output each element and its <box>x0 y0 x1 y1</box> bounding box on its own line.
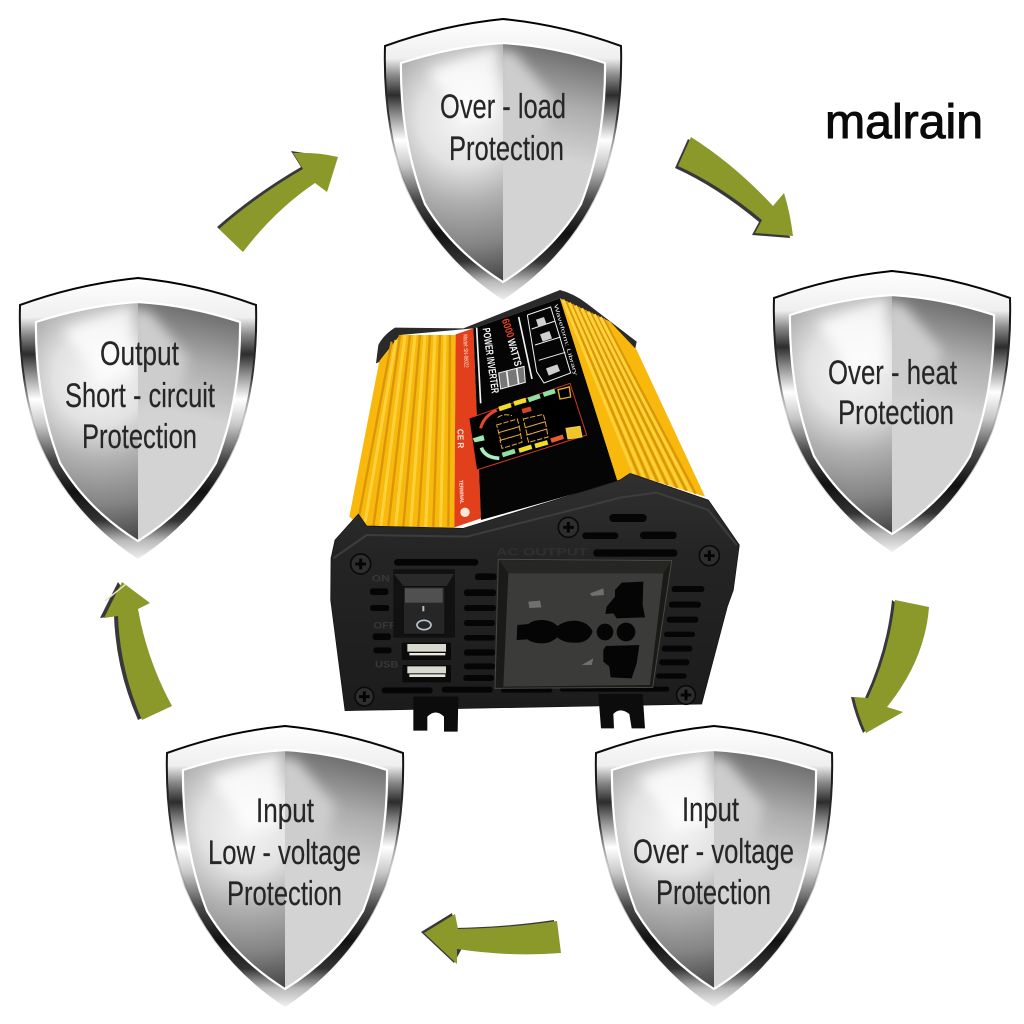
shield: Over-load Protection: Protection <box>449 130 564 168</box>
shield: Input Over-voltage Protection: Input <box>682 791 739 829</box>
rear black cap <box>376 290 637 363</box>
embossed labels: AC OUTPUT <box>496 547 588 559</box>
shield: Input Low-voltage Protection: Low - voltage <box>208 834 361 872</box>
product labels: POWER INVERTER <box>480 327 501 394</box>
shield: Over-heat Protection: Protection <box>838 394 954 432</box>
shield: Over-load Protection: Over - load <box>440 88 566 126</box>
embossed labels: OFF <box>373 621 396 631</box>
shield: Input Over-voltage Protection <box>596 726 832 1007</box>
shield: Output Short-circuit Protection: Output <box>100 335 179 373</box>
shield: Input Over-voltage Protection: Over - voltage <box>633 833 794 871</box>
inverter top housing <box>349 290 705 528</box>
power inverter <box>331 290 739 732</box>
front vents <box>370 514 704 693</box>
inverter front face <box>331 473 739 732</box>
shield: Output Short-circuit Protection <box>20 278 256 559</box>
arrow: load to heat <box>675 137 793 238</box>
logo: malrain: malrain <box>825 96 983 149</box>
shield: Input Low-voltage Protection: Protection <box>227 875 342 913</box>
right heat sink <box>560 298 705 497</box>
product labels: Waveform: Library <box>552 304 578 377</box>
arrow: over-voltage to low-voltage <box>421 913 561 964</box>
shield: Output Short-circuit Protection: Protection <box>82 418 197 456</box>
red label strip <box>454 328 481 527</box>
product labels: CE R <box>455 429 466 449</box>
left heat sink <box>349 335 456 528</box>
power switch <box>393 569 455 638</box>
product labels: 6000 <box>499 317 516 339</box>
shield: Over-heat Protection <box>774 271 1010 552</box>
screws <box>351 517 719 706</box>
shield: Over-heat Protection: Over - heat <box>828 354 957 392</box>
shield: Over-load Protection <box>385 19 621 300</box>
front housing <box>331 473 739 711</box>
shield: Input Low-voltage Protection: Input <box>256 792 314 830</box>
label icon grid <box>477 307 571 403</box>
AC socket <box>495 559 672 688</box>
shield: Output Short-circuit Protection: Short - circuit <box>65 377 215 415</box>
USB ports <box>402 643 451 682</box>
embossed labels: USB <box>375 659 399 669</box>
shield: Input Low-voltage Protection <box>167 726 403 1007</box>
arrow: heat to over-voltage <box>851 600 929 733</box>
arrow: low-voltage to short-circuit <box>100 582 172 720</box>
arrow: short-circuit to load <box>217 151 338 252</box>
product labels: WATTS <box>504 338 524 368</box>
black label panel <box>473 298 618 520</box>
embossed labels <box>372 547 588 669</box>
mounting feet <box>413 694 645 732</box>
product labels <box>455 304 578 517</box>
shield: Input Over-voltage Protection: Protection <box>656 874 771 912</box>
LCD display <box>469 383 587 470</box>
product labels: Model: SN-06022 <box>461 334 469 368</box>
product labels: TERMINAL <box>457 480 464 505</box>
embossed labels: ON <box>372 573 390 583</box>
